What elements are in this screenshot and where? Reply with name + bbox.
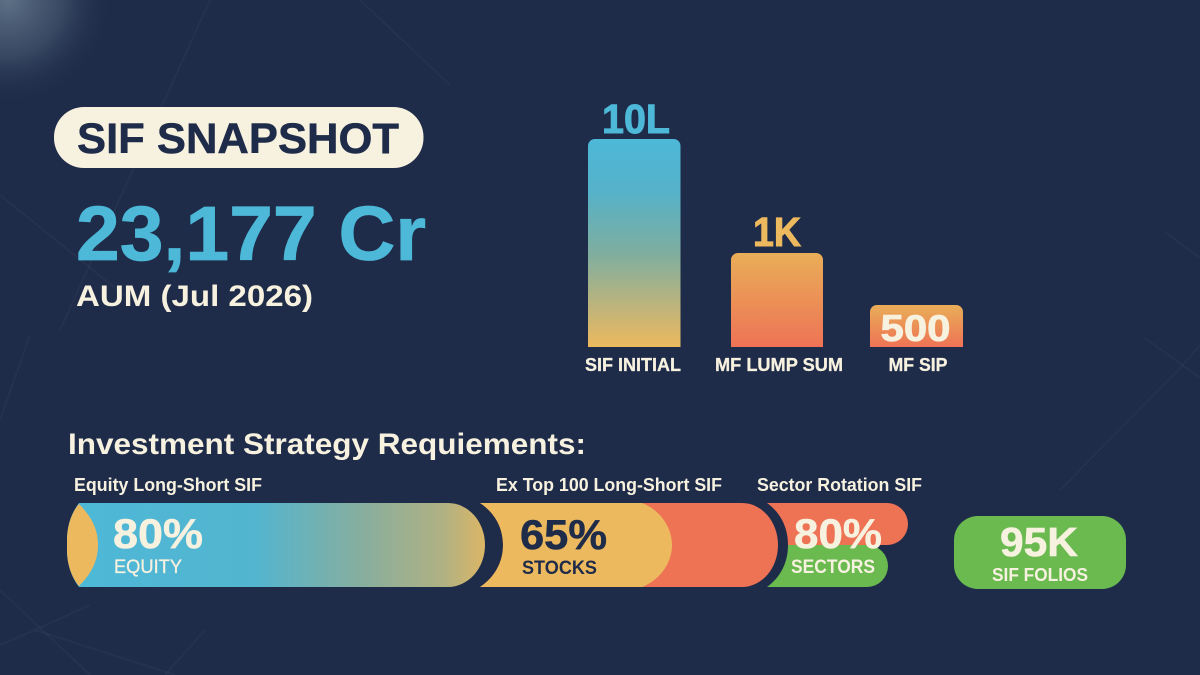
stat pill: 95K SIF folios: 95K [1000, 519, 1078, 565]
bar: SIF initial 10L: SIF INITIAL [585, 355, 681, 375]
segment: sectors 80% [767, 503, 908, 587]
label: Sector Rotation SIF: Sector Rotation SIF [757, 474, 922, 495]
headline metric: AUM: 23,177 Cr [76, 191, 426, 277]
segment: sectors 80%: 80% [794, 510, 882, 557]
bar: MF lump sum 1K [715, 209, 843, 375]
bar: SIF initial 10L [585, 96, 681, 375]
headline metric: AUM [76, 191, 426, 313]
segment: equity 80%: EQUITY [114, 557, 182, 578]
title pill: SIF SNAPSHOT: SIF SNAPSHOT [77, 116, 399, 163]
segment: sectors 80%: SECTORS [791, 557, 875, 578]
bar: MF SIP 500: MF SIP [888, 355, 948, 375]
bar: MF lump sum 1K: 1K [753, 209, 801, 255]
bar: SIF initial 10L: 10L [602, 96, 670, 142]
segment: equity 80%: 80% [113, 510, 203, 557]
headline metric: AUM: AUM (Jul 2026) [76, 280, 313, 313]
bar: MF lump sum 1K: MF LUMP SUM [715, 355, 843, 375]
bar: MF SIP 500 [870, 305, 963, 375]
bar: MF SIP 500: 500 [880, 308, 950, 349]
title pill: SIF SNAPSHOT [54, 107, 424, 168]
section heading: Investment Strategy Requiements: [68, 428, 586, 461]
segment: stocks 65%: 65% [520, 511, 607, 558]
label: Equity Long-Short SIF: Equity Long-Short SIF [74, 474, 262, 495]
segment: stocks 65%: STOCKS [522, 558, 597, 579]
label: Ex Top 100 Long-Short SIF: Ex Top 100 Long-Short SIF [496, 474, 722, 495]
bar chart: minimum investment [585, 96, 963, 375]
segmented strategy bar [67, 474, 922, 587]
segment: stocks 65% [480, 503, 778, 587]
stat pill: 95K SIF folios [954, 516, 1126, 589]
segment: equity 80% [67, 503, 485, 587]
stat pill: 95K SIF folios: SIF FOLIOS [992, 565, 1088, 585]
